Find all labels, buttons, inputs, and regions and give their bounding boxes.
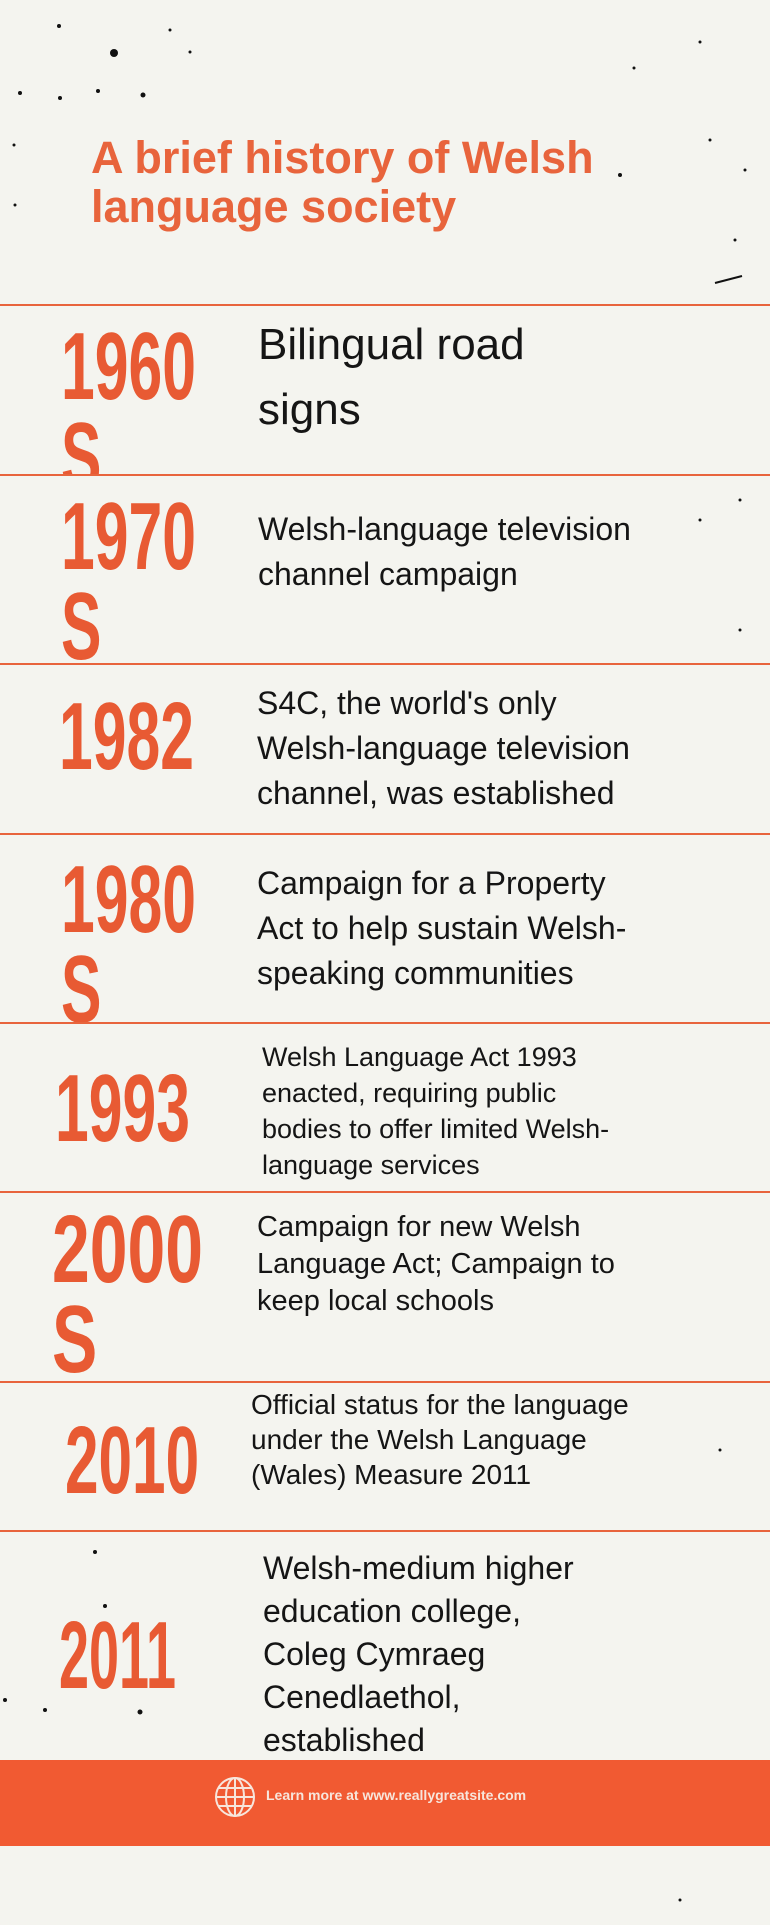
text 1970s: channel campaign [258,556,518,592]
title: language society [91,181,456,232]
footer band [0,1760,770,1846]
title [91,132,594,232]
text 1993: Welsh Language Act 1993 [262,1042,577,1072]
year 2011: 2011 [59,1602,176,1709]
year 1993: 1993 [55,1055,190,1162]
text 1982: Welsh-language television [257,730,630,766]
text 1960s: Bilingual road [258,320,525,369]
text 1993: enacted, requiring public [262,1078,556,1108]
footer text: Learn more at www.reallygreatsite.com [266,1787,526,1803]
text 1970s [258,511,631,592]
row: 1993 [55,1042,609,1180]
text 2011: Welsh-medium higher [263,1550,574,1586]
year 2010: 2010 [65,1407,199,1514]
year 2000s: 2000 [52,1196,203,1303]
text 1982: S4C, the world's only [257,685,557,721]
text 2010: Official status for the language [251,1389,629,1420]
text 1980s: Act to help sustain Welsh- [257,910,626,946]
text 1970s: Welsh-language television [258,511,631,547]
text 1982: channel, was established [257,775,615,811]
text 2000s: Language Act; Campaign to [257,1248,615,1280]
title: A brief history of Welsh [91,132,594,183]
text 1960s [258,320,525,434]
row: 1970s [61,483,631,663]
row: 1960s [61,313,525,474]
year 1980s: 1980 [61,846,196,953]
year 1960s: 1960 [61,313,196,420]
text 2000s: keep local schools [257,1285,494,1317]
text 1980s [257,865,626,991]
row: 2011 [59,1550,574,1758]
text 2011: Coleg Cymraeg [263,1636,485,1672]
text 2010: under the Welsh Language [251,1424,587,1455]
text 2000s: Campaign for new Welsh [257,1211,580,1243]
text 2010: (Wales) Measure 2011 [251,1459,531,1490]
year 1970s: 1970 [61,483,196,590]
year 1960s [61,313,196,474]
text 2010 [251,1389,629,1490]
text 1982 [257,685,630,811]
icon: globe [215,1777,255,1817]
row: 1980s [61,846,626,1022]
text 1993 [262,1042,609,1180]
text 1980s: Campaign for a Property [257,865,606,901]
text 1960s: signs [258,385,361,434]
row: 2000s [52,1196,615,1381]
row: 1982 [59,683,630,811]
text 2011 [263,1550,574,1758]
text 1980s: speaking communities [257,955,574,991]
text 2011: established [263,1722,425,1758]
year 1980s [61,846,196,1022]
text 2011: Cenedlaethol, [263,1679,460,1715]
year 1982: 1982 [59,683,194,790]
text 2000s [257,1211,615,1317]
year 2000s [52,1196,203,1381]
text 2011: education college, [263,1593,521,1629]
row: 2010 [65,1389,629,1514]
year 1970s [61,483,196,663]
text 1993: bodies to offer limited Welsh- [262,1114,609,1144]
text 1993: language services [262,1150,480,1180]
